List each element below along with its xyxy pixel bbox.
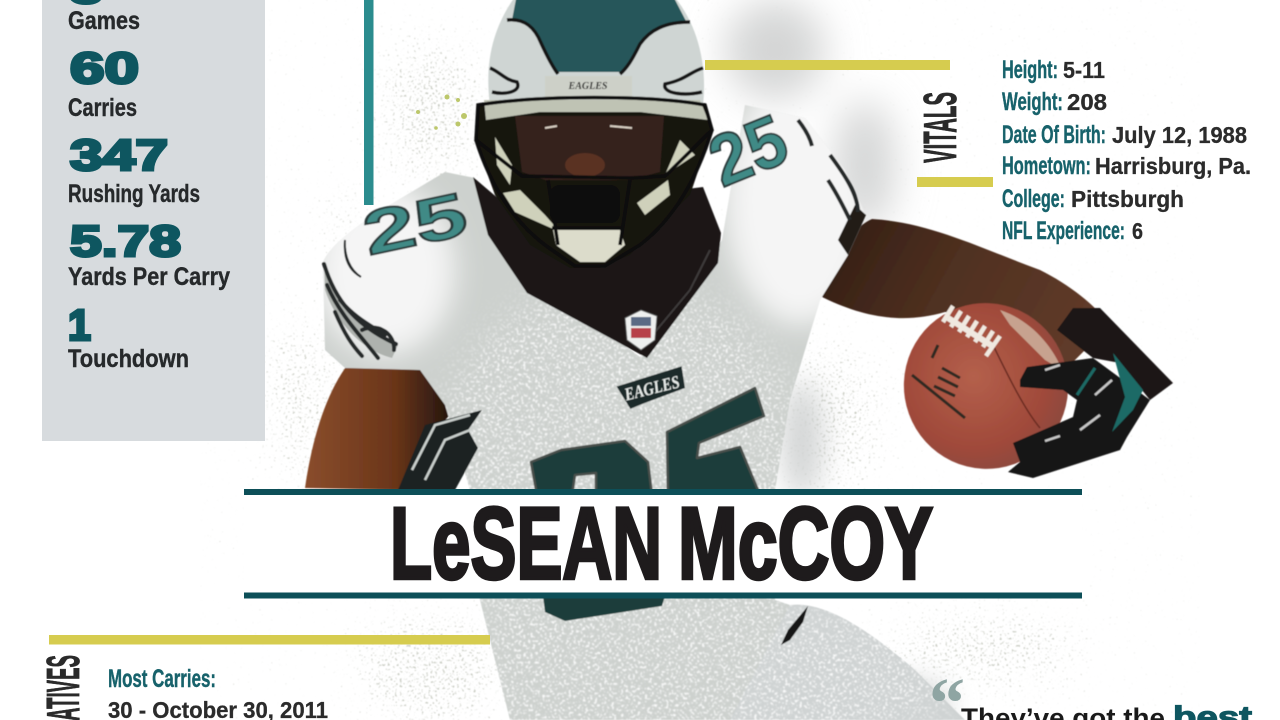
eagles wordmark (616, 366, 689, 411)
stat: yards per carry (68, 217, 230, 291)
stat: carries: Carries (68, 94, 137, 122)
cage backing (475, 105, 712, 268)
face (515, 116, 664, 180)
face mask (476, 98, 712, 266)
panel: superlatives (37, 635, 490, 720)
player name: LeSEAN (390, 486, 662, 600)
left shoulder number: 25 (357, 180, 473, 269)
ball markings (912, 345, 965, 418)
ball laces (948, 318, 994, 347)
helmet visor band (484, 100, 708, 120)
right shoulder number: 25 (698, 100, 799, 202)
eagles wordmark: EAGLES (622, 372, 682, 405)
jersey highlights (315, 75, 960, 720)
teal vertical rule (364, 0, 374, 205)
player photo illustration (305, 0, 1173, 720)
ball seam (993, 345, 1040, 428)
player name: McCOY (678, 486, 933, 600)
vitals list: College: (1002, 185, 1065, 213)
stat: yards per carry: Yards Per Carry (68, 263, 230, 291)
panel: superlatives: ATIVES (37, 655, 89, 720)
vitals list: 5-11 (1063, 57, 1105, 83)
gray motion blur behind shoulder (725, 0, 895, 230)
vitals list: 208 (1067, 89, 1107, 115)
stat: rushing yards (68, 131, 200, 208)
pants swoosh (781, 606, 808, 645)
most carries label: Most Carries: (108, 665, 216, 693)
stat: carries: 60 (70, 44, 139, 93)
vitals list: July 12, 1988 (1112, 122, 1247, 148)
nfl shield (625, 310, 657, 350)
glove (1008, 353, 1150, 478)
vitals list: Height: (1002, 56, 1058, 84)
stat: touchdown: Touchdown (68, 345, 189, 373)
football (881, 280, 1091, 492)
right sleeve eagle logo (798, 120, 858, 220)
left arm (305, 364, 455, 490)
stat: rushing yards: 347 (70, 131, 168, 180)
name banner (244, 486, 1082, 600)
helmet green crown (512, 0, 687, 72)
left hand glove (398, 410, 482, 490)
stat: touchdown: 1 (68, 301, 91, 350)
helmet (475, 0, 712, 268)
nose (565, 153, 605, 177)
quote (929, 663, 1252, 720)
wristband (1057, 308, 1173, 400)
side shading of jersey (782, 380, 950, 720)
stat: games: Games (68, 7, 140, 35)
left sleeve eagle logo (324, 262, 398, 358)
vitals list: 6 (1132, 218, 1143, 244)
green paint flecks near helmet (416, 94, 467, 130)
pants (720, 605, 965, 720)
helmet: EAGLES (568, 81, 608, 92)
right arm (820, 219, 1110, 375)
eyes (545, 126, 632, 128)
panel: vitals: VITALS (914, 92, 966, 163)
left sleeve swoosh (345, 240, 361, 277)
vitals list: NFL Experience: (1002, 217, 1125, 245)
collar (473, 177, 721, 358)
panel: vitals (705, 56, 1251, 245)
mouth guard (550, 185, 620, 223)
background splatter (265, 30, 1090, 720)
jersey speckles (430, 280, 960, 720)
vitals list: Weight: (1002, 88, 1063, 116)
vitals list (1002, 56, 1251, 245)
vitals list: Harrisburg, Pa. (1095, 153, 1251, 179)
chest number (531, 388, 764, 495)
vitals list: Pittsburgh (1071, 186, 1184, 212)
stat: touchdown (68, 301, 189, 373)
sleeve cuff (838, 205, 866, 255)
vitals list: Date Of Birth: (1002, 121, 1106, 149)
stat: carries (68, 44, 139, 122)
lower number segment (543, 596, 665, 621)
chin strap (553, 230, 625, 262)
helmet wing lines (490, 20, 703, 94)
stat: yards per carry: 5.78 (70, 217, 181, 266)
panel: season stats (42, 0, 265, 441)
jersey (323, 105, 866, 720)
helmet shell (488, 0, 704, 105)
vitals list: Hometown: (1002, 152, 1091, 180)
helmet pads (495, 137, 695, 232)
stat: rushing yards: Rushing Yards (68, 180, 200, 208)
helmet brow plate (545, 76, 632, 100)
